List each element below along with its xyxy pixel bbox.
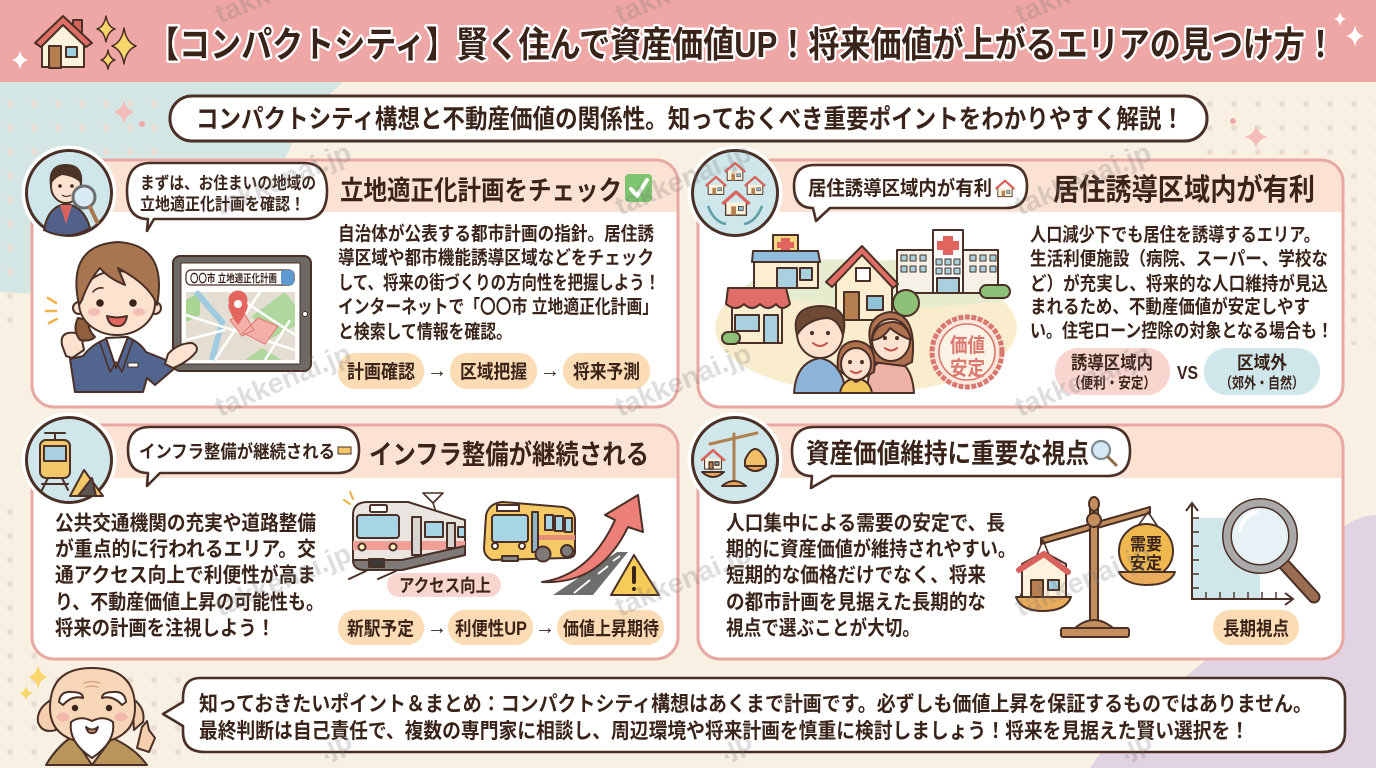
pill: 長期視点 [1213,610,1299,645]
panel heading: 立地適正化計画をチェック [340,176,622,206]
comparison pills: 誘導区域内 [1071,353,1153,373]
watermark: .jp [1114,724,1156,766]
speech bubble: インフラ整備が継続される [139,441,335,462]
avatar: train and mountain [25,416,113,504]
body text: と検索して情報を確認。 [338,321,512,343]
illustration: bus [484,502,575,562]
body text [1030,223,1333,342]
watermark: takkenai.jp [1010,537,1156,623]
illustration: tablet with map [173,256,311,371]
step pills: → [427,360,447,382]
step pills: 区域把握 [460,361,527,383]
body text: ど）が充実し、将来的な人口維持が見込 [1030,272,1328,295]
watermark: takkenai.jp [210,337,356,423]
avatar: scale [691,416,779,504]
icon: magnifying glass [1227,503,1314,597]
stamp: 価値安定: 価値 [950,334,985,357]
speech bubble heading: 資産価値維持に重要な視点 [806,439,1089,469]
body text [55,512,324,640]
watermark: takkenai.jp [1010,136,1156,222]
label: 需要安定: 安定 [1130,554,1162,573]
arrow: rising value [542,495,643,582]
watermark: takkenai.jp [610,537,756,623]
illustration: town and family [715,230,1017,393]
panel: 資産価値維持 [691,416,1343,659]
watermark: takkenai.jp [1010,337,1156,423]
subtitle pill [170,96,1207,141]
body text: して、将来の街づくりの方向性を把握しよう！ [338,271,660,294]
body text: インターネットで「〇〇市 立地適正化計画」 [338,295,658,318]
summary callout: 最終判断は自己責任で、複数の専門家に相談し、周辺環境や将来計画を慎重に検討しましょう！将来を見据えた賢い選択を！ [199,720,1249,743]
step pills: 新駅予定 [347,618,414,640]
comparison pills: VS [1177,363,1198,383]
step pills: 利便性UP [455,618,527,640]
illustration: woman pointing [46,242,197,392]
label: アクセス向上: アクセス向上 [399,576,491,596]
header band [0,0,1376,82]
character: elder [19,665,155,765]
step pills [338,610,664,645]
illustration: balance scale [1016,497,1175,637]
watermark: .jp [314,724,356,766]
body text: まれるため、不動産価値が安定しやす [1030,295,1310,318]
step pills: → [427,617,447,639]
body text: 生活利便施設（病院、スーパー、学校な [1030,247,1328,270]
stamp: 価値安定 [932,317,1002,387]
panel: 居住誘導区域 [691,149,1343,407]
summary callout [163,678,1345,752]
subtitle pill: コンパクトシティ構想と不動産価値の関係性。知っておくべき重要ポイントをわかりやすく解説！ [196,104,1184,134]
panel: 立地適正化計画 [25,149,678,407]
panel heading: 居住誘導区域内が有利 [1053,173,1315,207]
icon: house with sparkles [35,16,136,69]
panel: インフラ整備 [25,416,678,659]
speech bubble: 立地適正化計画を確認！ [140,195,305,214]
body text: が重点的に行われるエリア。交 [55,537,316,561]
speech bubble [128,427,359,486]
chart: long-term axes [1186,503,1293,605]
label: 需要安定: 需要 [1130,535,1162,554]
body text: 人口減少下でも居住を誘導するエリア。 [1030,223,1320,246]
watermark [210,0,1156,766]
watermark: takkenai.jp [610,136,756,222]
step pills: 計画確認 [347,360,415,383]
speech bubble [794,165,1027,221]
body text: 期的に資産価値が維持されやすい。 [726,537,1016,561]
watermark: takkenai.jp [210,537,356,623]
avatar: man with magnifier [25,149,113,237]
body text [726,512,1016,640]
illustration: train [344,492,465,579]
step pills: 将来予測 [573,361,640,383]
body text: り、不動産価値上昇の可能性も。 [55,591,324,614]
body text: 視点で選ぶことが大切。 [726,616,920,640]
avatar: houses [691,149,779,237]
step pills [338,353,650,389]
step pills: → [540,360,560,382]
speech bubble heading [792,427,1130,488]
body text: 人口集中による需要の安定で、長 [726,512,1005,535]
body text: 通アクセス向上で利便性が高ま [55,563,316,587]
body text: 公共交通機関の充実や道路整備 [55,512,316,535]
speech bubble: 居住誘導区域内が有利 [808,176,992,200]
comparison pills: （便利・安定） [1068,374,1156,392]
speech bubble [127,163,327,231]
comparison pills [1055,348,1320,395]
illustration: road and warning [553,552,659,595]
illustration: tablet with map: 〇〇市 立地適正化計画 [190,271,277,285]
body text: 将来の計画を注視しよう！ [55,617,275,640]
body text: 導区域や都市機能誘導区域などをチェック [338,247,654,269]
step pills: → [535,617,555,639]
watermark: takkenai.jp [610,337,756,423]
speech bubble: まずは、お住まいの地域の [140,174,316,193]
watermark: takkenai.jp [210,136,356,222]
stamp: 価値安定: 安定 [950,357,985,380]
watermark: .jp [714,724,756,766]
label: 需要安定 [1130,535,1162,573]
body text: の都市計画を見据えた長期的な [726,591,986,614]
comparison pills: （郊外・自然） [1220,374,1304,392]
pill: 長期視点: 長期視点 [1223,618,1289,640]
body text: 短期的な価格だけでなく、将来 [726,564,986,587]
body text: 自治体が公表する都市計画の指針。居住誘 [338,222,654,245]
step pills: 価値上昇期待 [563,618,659,640]
panel heading: インフラ整備が継続される [369,439,649,470]
icon: green check [625,174,652,202]
comparison pills: 区域外 [1237,353,1287,373]
body text [338,222,660,343]
